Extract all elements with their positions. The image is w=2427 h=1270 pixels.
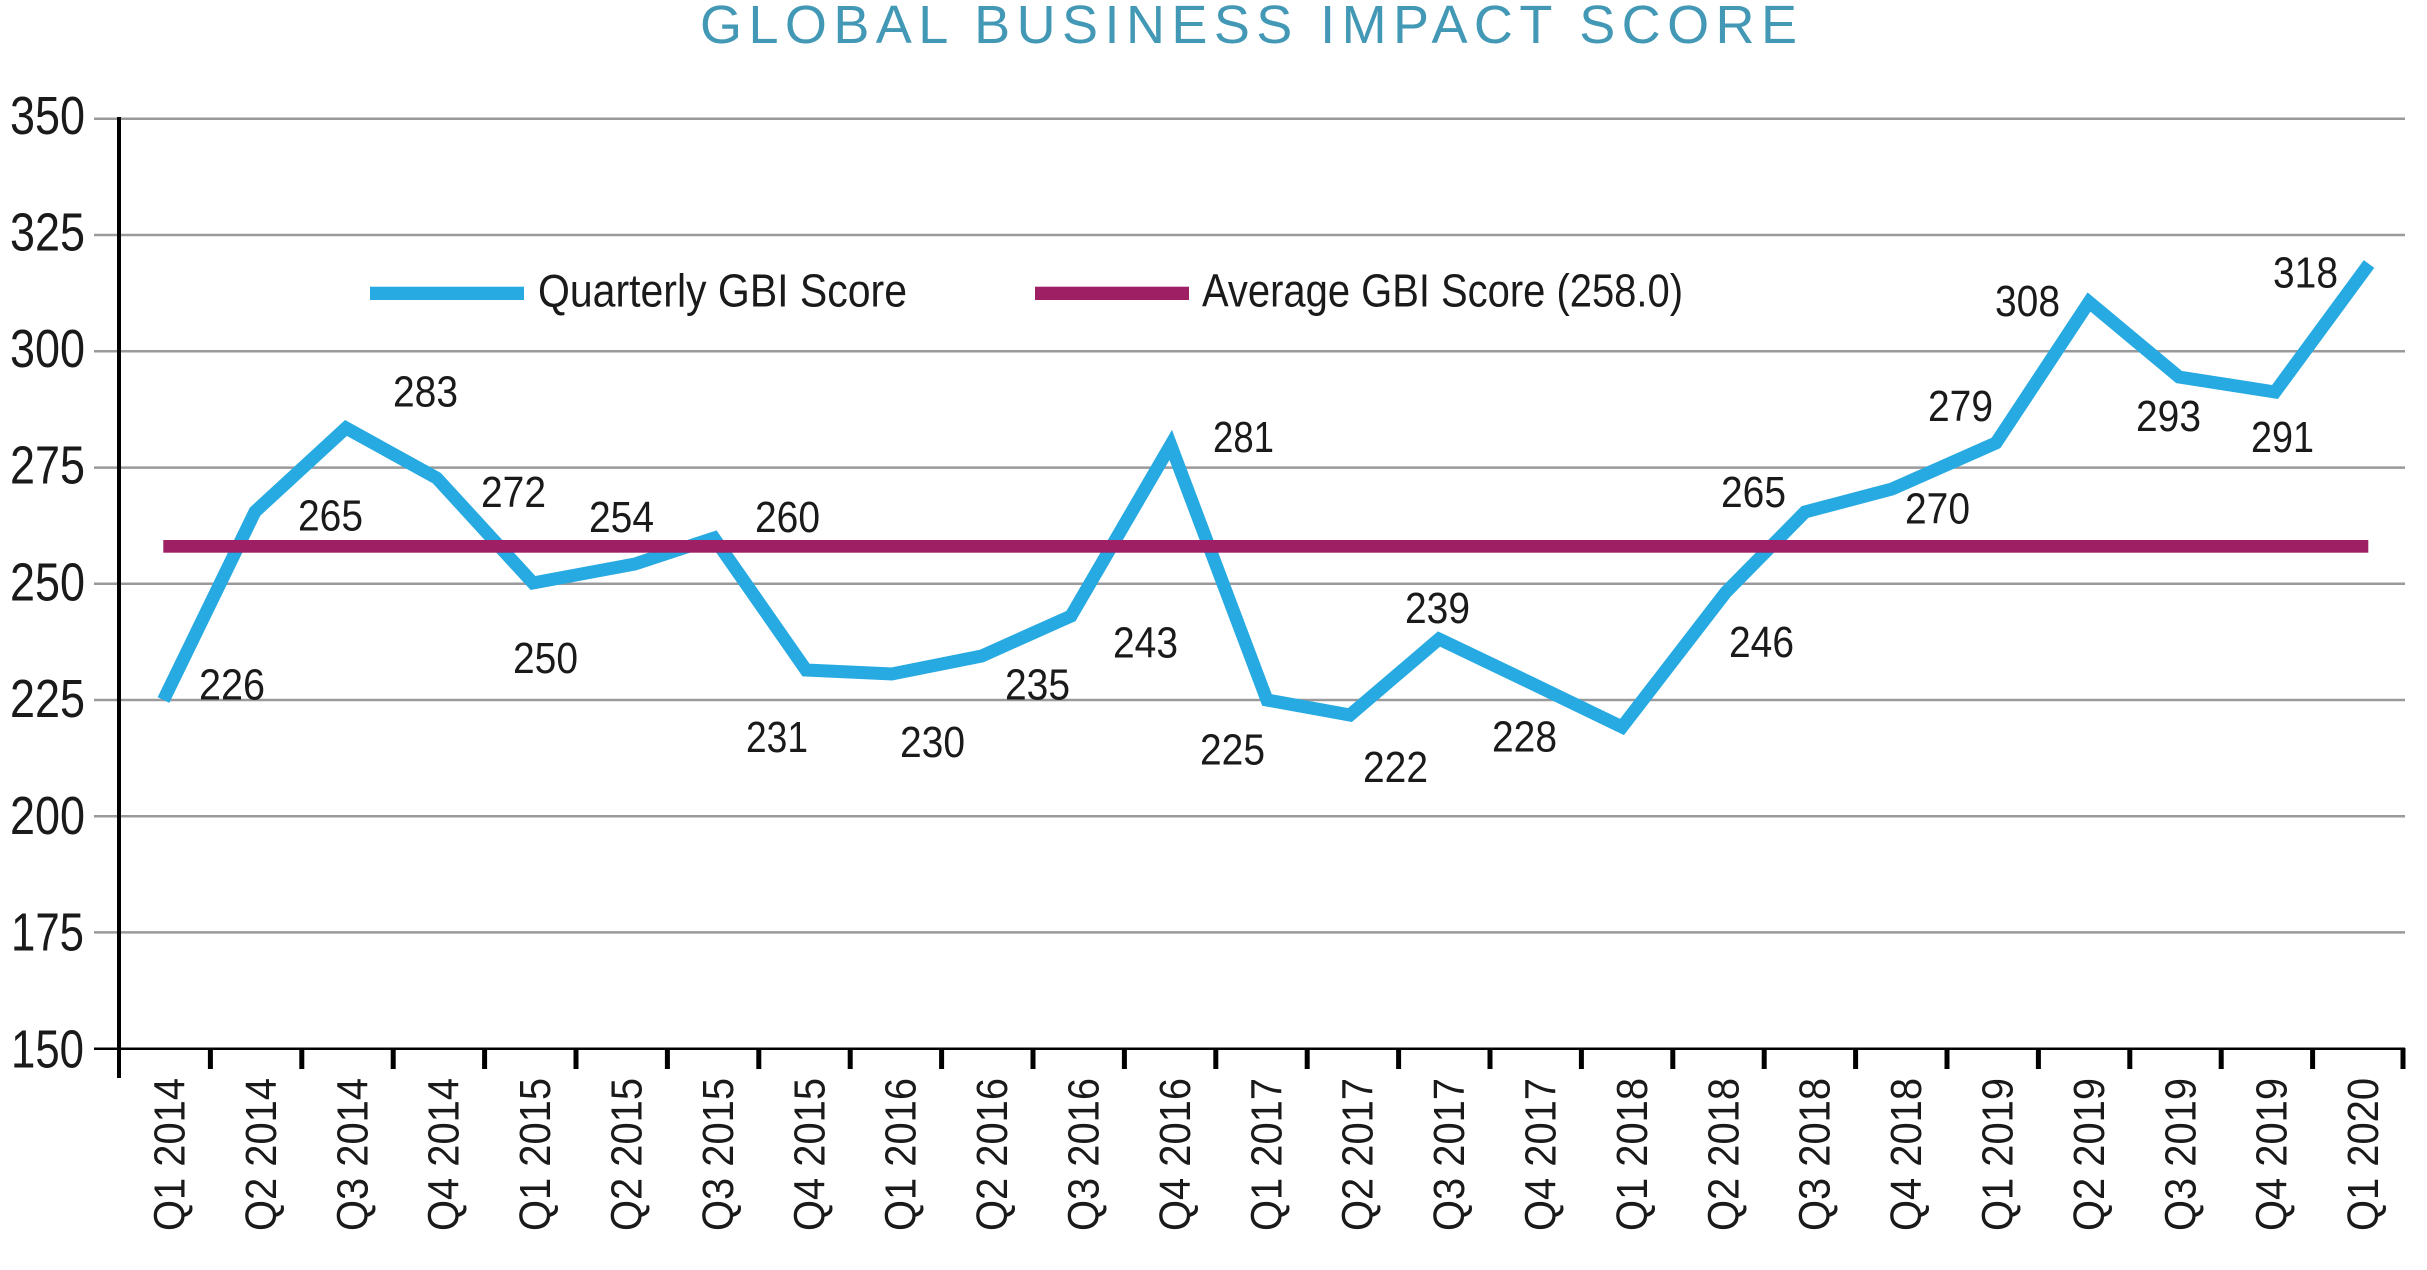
- x axis labels: Q1 2019: [1974, 1078, 2022, 1231]
- data labels: 265: [1721, 468, 1786, 517]
- x axis labels: Q3 2015: [694, 1078, 743, 1231]
- x axis labels: Q3 2017: [1425, 1078, 1474, 1231]
- x axis labels: Q1 2018: [1608, 1078, 1657, 1231]
- average GBI score line: [163, 540, 2368, 553]
- x axis labels: Q2 2017: [1334, 1078, 1383, 1231]
- legend: [370, 265, 1683, 317]
- data labels: 281: [1213, 413, 1274, 462]
- data labels: 272: [481, 468, 546, 517]
- x axis labels: Q1 2017: [1242, 1078, 1291, 1231]
- x axis labels: Q4 2014: [420, 1078, 469, 1231]
- data labels: 260: [755, 493, 820, 542]
- y axis labels: 250: [10, 552, 85, 612]
- data labels: 254: [589, 493, 654, 542]
- x axis labels: Q2 2015: [602, 1078, 652, 1231]
- x axis labels: Q4 2015: [785, 1078, 834, 1231]
- y axis labels: 275: [10, 436, 85, 496]
- x axis: [94, 1048, 2405, 1231]
- data labels: 228: [1492, 712, 1557, 762]
- data labels: 308: [1995, 277, 2060, 326]
- y axis: [10, 86, 119, 1080]
- x axis labels: Q3 2016: [1060, 1078, 1108, 1231]
- x axis labels: Q2 2019: [2065, 1078, 2114, 1231]
- data labels: 235: [1005, 660, 1070, 710]
- x axis labels: Q4 2019: [2248, 1078, 2297, 1231]
- data labels: 283: [393, 368, 458, 416]
- x axis labels: Q1 2014: [146, 1078, 194, 1231]
- data labels: 318: [2273, 248, 2338, 298]
- y axis labels: 175: [11, 902, 84, 962]
- x axis labels: Q1 2016: [877, 1078, 926, 1231]
- y axis labels: 300: [10, 319, 85, 379]
- data labels: [199, 248, 2338, 792]
- y axis labels: 225: [10, 669, 85, 729]
- y axis labels: 150: [11, 1020, 84, 1080]
- x axis labels: Q3 2014: [328, 1078, 377, 1231]
- x axis labels: Q4 2017: [1516, 1078, 1566, 1231]
- legend: quarterly GBI score: Quarterly GBI Score: [538, 265, 907, 317]
- y axis labels: 325: [10, 202, 85, 262]
- x axis labels: [146, 1078, 2388, 1231]
- y axis labels: [10, 86, 85, 1080]
- x axis labels: Q2 2018: [1699, 1078, 1748, 1231]
- x axis labels: Q1 2020: [2339, 1078, 2388, 1231]
- data labels: 293: [2136, 392, 2201, 441]
- data labels: 250: [513, 634, 578, 683]
- legend: average GBI score: Average GBI Score (258.0): [1202, 265, 1683, 317]
- data labels: 231: [746, 713, 808, 762]
- x axis labels: Q1 2015: [511, 1078, 560, 1231]
- x axis labels: Q4 2016: [1151, 1078, 1200, 1231]
- legend: average GBI score: [1035, 265, 1683, 317]
- data labels: 246: [1729, 618, 1794, 667]
- data labels: 222: [1363, 743, 1428, 792]
- data labels: 230: [900, 718, 965, 767]
- x axis labels: Q2 2014: [237, 1078, 286, 1231]
- data labels: 291: [2251, 413, 2314, 462]
- data labels: 243: [1113, 618, 1178, 668]
- y axis labels: 350: [10, 86, 85, 146]
- x axis labels: Q2 2016: [968, 1078, 1017, 1231]
- data labels: 225: [1200, 726, 1265, 774]
- quarterly GBI score line: [164, 264, 2369, 727]
- y axis labels: 200: [10, 786, 85, 846]
- legend: quarterly GBI score: [370, 265, 907, 317]
- data labels: 239: [1405, 584, 1470, 633]
- x axis labels: Q3 2019: [2156, 1078, 2205, 1231]
- data labels: 270: [1905, 484, 1970, 534]
- x axis labels: Q4 2018: [1882, 1078, 1931, 1231]
- data labels: 279: [1928, 382, 1993, 431]
- x axis labels: Q3 2018: [1791, 1078, 1840, 1231]
- data labels: 226: [199, 660, 265, 709]
- data labels: 265: [298, 492, 363, 540]
